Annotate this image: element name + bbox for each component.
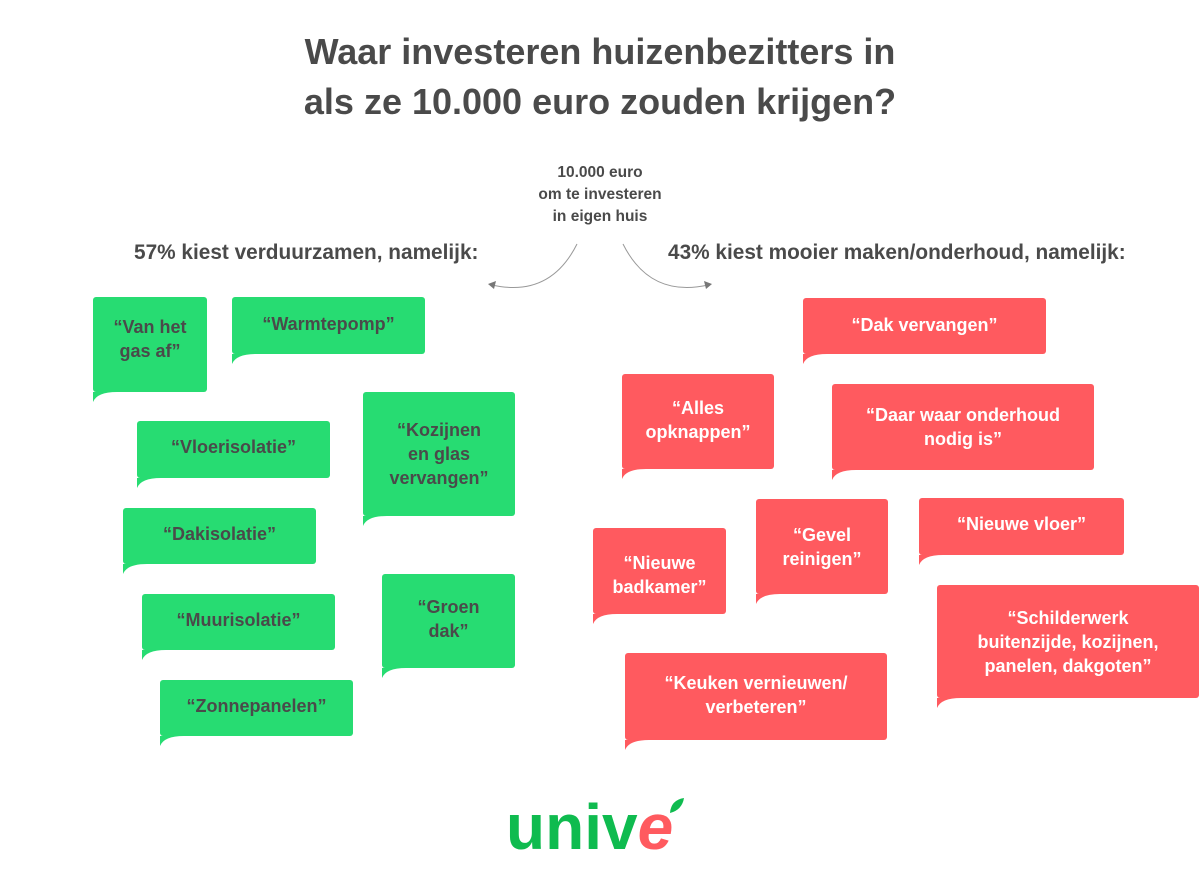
bubble: Groen dak (382, 574, 515, 668)
center text: 10.000 euro (557, 164, 643, 181)
arrows (488, 244, 712, 289)
panel: red bubbles (593, 298, 1199, 750)
title (304, 31, 896, 122)
bubble: Vloerisolatie: “Vloerisolatie” (171, 437, 296, 457)
bubble: Gevel reinigen: “Gevel (793, 525, 851, 545)
bubble: Nieuwe vloer: “Nieuwe vloer” (957, 514, 1086, 534)
bubble: Muurisolatie: “Muurisolatie” (176, 610, 300, 630)
panel: green bubbles (93, 297, 515, 746)
bubble: Zonnepanelen: “Zonnepanelen” (186, 696, 326, 716)
bubble: Van het gas af: gas af” (119, 341, 181, 361)
bubble: Alles opknappen: opknappen” (645, 422, 750, 442)
bubble: Van het gas af: “Van het (113, 317, 187, 337)
bubble: Zonnepanelen (160, 680, 353, 736)
center text: om te investeren (538, 186, 662, 203)
bubble: Kozijnen: vervangen” (389, 468, 489, 488)
title: als ze 10.000 euro zouden krijgen? (304, 81, 896, 122)
bubble: Daar waar onderhoud: “Daar waar onderhoud (866, 405, 1060, 425)
bubble: Keuken (625, 653, 887, 740)
bubble: Warmtepomp: “Warmtepomp” (262, 314, 395, 334)
bubble: Kozijnen (363, 392, 515, 516)
bubble: Schilderwerk: buitenzijde, kozijnen, (977, 632, 1158, 652)
bubble: Dakisolatie (123, 508, 316, 564)
bubble: Dak vervangen: “Dak vervangen” (851, 315, 998, 335)
title: Waar investeren huizenbezitters in (305, 31, 895, 72)
center text (538, 164, 662, 225)
bubble: Vloerisolatie (137, 421, 330, 478)
bubble: Dakisolatie: “Dakisolatie” (163, 524, 276, 544)
bubble: Keuken: verbeteren” (705, 697, 807, 717)
bubble: Schilderwerk: panelen, dakgoten” (984, 656, 1152, 676)
bubble: Schilderwerk: “Schilderwerk (1007, 608, 1129, 628)
bubble: Alles opknappen (622, 374, 774, 469)
right heading: 43% kiest mooier maken/onderhoud, namelijk: (668, 241, 1126, 264)
bubble: Nieuwe vloer (919, 498, 1124, 555)
logo: unive (506, 791, 673, 863)
center text: in eigen huis (553, 208, 647, 225)
bubble: Daar waar onderhoud (832, 384, 1094, 470)
bubble: Nieuwe badkamer: badkamer” (612, 577, 707, 597)
bubble: Nieuwe badkamer (593, 528, 726, 614)
bubble: Daar waar onderhoud: nodig is” (924, 429, 1002, 449)
bubble: Gevel reinigen: reinigen” (782, 549, 862, 569)
bubble: Schilderwerk (937, 585, 1199, 698)
bubble: Kozijnen: en glas (408, 444, 470, 464)
bubble: Keuken: “Keuken vernieuwen/ (664, 673, 848, 693)
bubble: Van het gas af (93, 297, 207, 392)
bubble: Groen dak: “Groen (417, 597, 480, 617)
bubble: Dak vervangen (803, 298, 1046, 354)
bubble: Alles opknappen: “Alles (672, 398, 724, 418)
bubble: Kozijnen: “Kozijnen (397, 420, 481, 440)
bubble: Muurisolatie (142, 594, 335, 650)
bubble: Warmtepomp (232, 297, 425, 354)
bubble: Nieuwe badkamer: “Nieuwe (623, 553, 696, 573)
bubble: Gevel reinigen (756, 499, 888, 594)
bubble: Groen dak: dak” (428, 621, 469, 641)
left heading: 57% kiest verduurzamen, namelijk: (134, 241, 478, 264)
